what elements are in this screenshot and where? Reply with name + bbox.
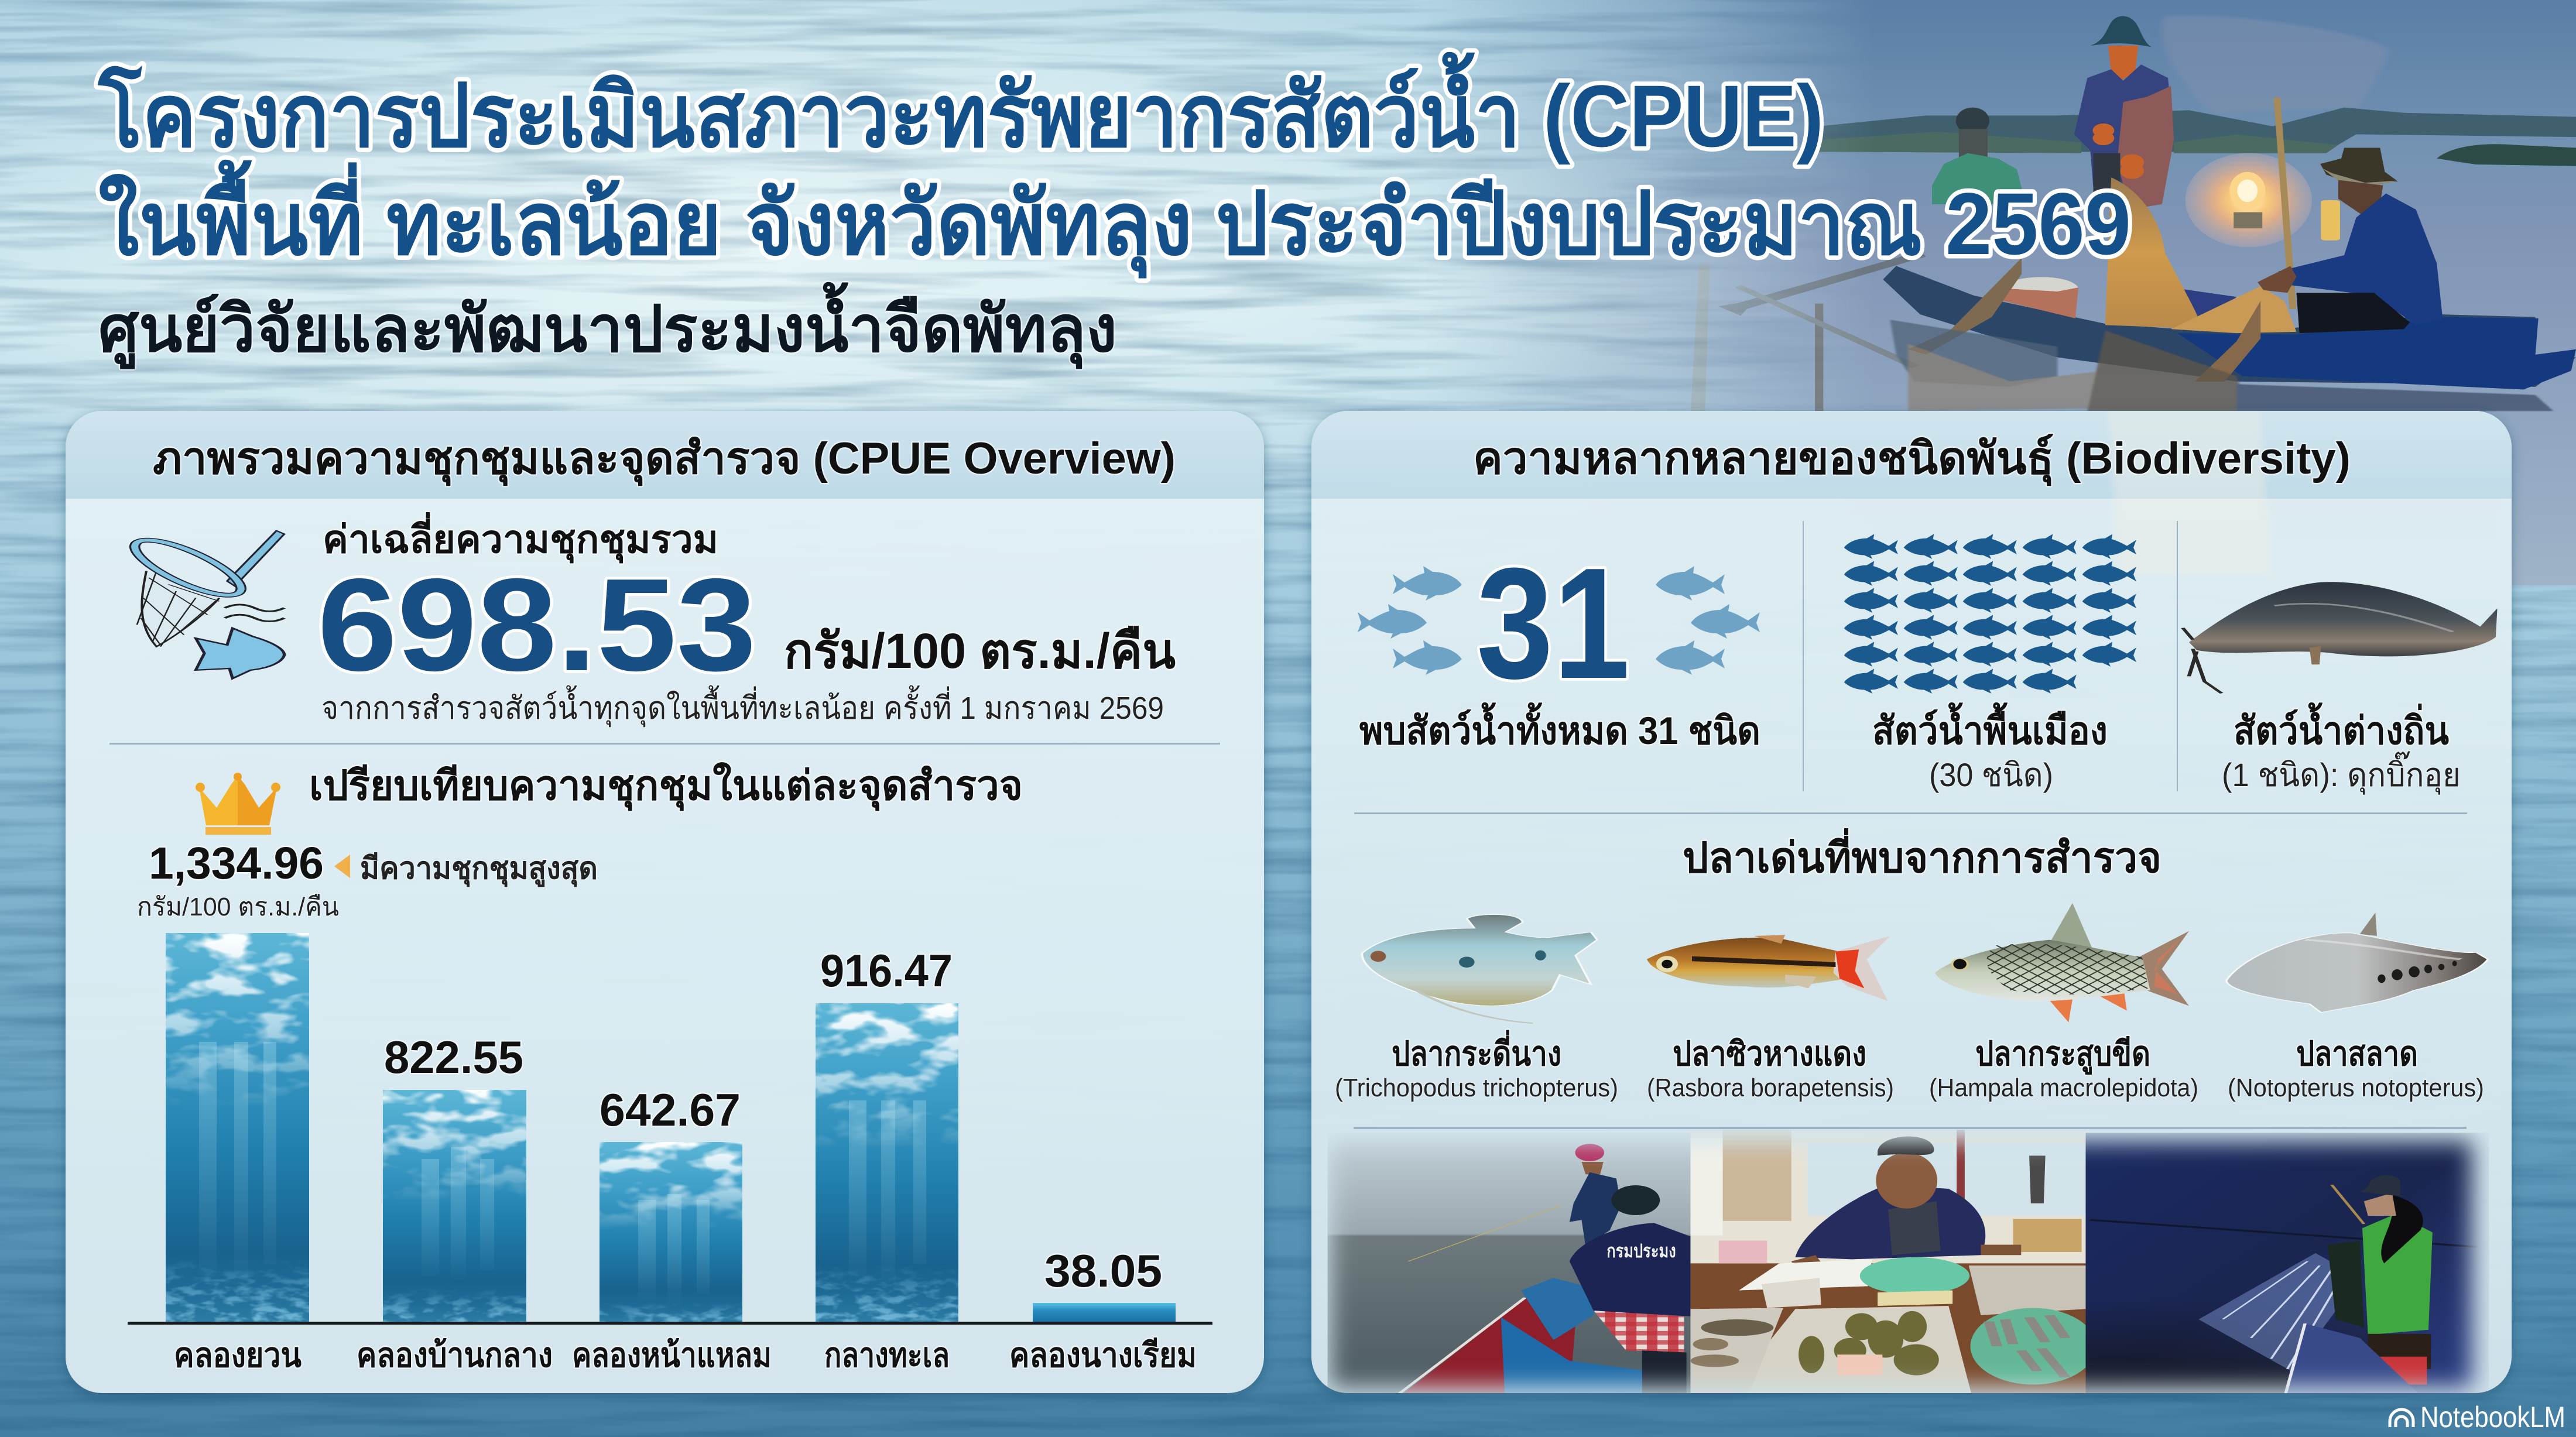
subtitle: ศูนย์วิจัยและพัฒนาประมงน้ำจืดพัทลุง xyxy=(98,282,1117,369)
axis label: คลองนางเรียม: คลองนางเรียม xyxy=(1009,1336,1197,1374)
label: average density: ค่าเฉลี่ยความชุกชุมรวม xyxy=(323,512,718,564)
scientific name 4: (Notopterus notopterus) xyxy=(2228,1074,2484,1102)
heading: CPUE overview: ภาพรวมความชุกชุมและจุดสำรวจ (CPUE Overview) xyxy=(153,434,1176,486)
icon: grid of native fish xyxy=(1844,534,2136,694)
axis label: คลองบ้านกลาง: คลองบ้านกลาง xyxy=(357,1336,553,1374)
title line 2: ในพื้นที่ ทะเลน้อย จังหวัดพัทลุง ประจำปีงบประมาณ 2569 xyxy=(98,159,2131,279)
seated man xyxy=(2258,148,2443,333)
panel: biodiversity xyxy=(1311,411,2512,1393)
icon: pointer arrow xyxy=(334,855,350,878)
icon: six small fish xyxy=(1358,566,1760,675)
panel header band xyxy=(66,411,1264,499)
icon: crown xyxy=(196,773,280,835)
small unit: กรัม/100 ตร.ม./คืน xyxy=(137,893,339,921)
highest note: มีความชุกชุมสูงสุด xyxy=(360,852,598,887)
scientific name 1: (Trichopodus trichopterus) xyxy=(1335,1074,1618,1102)
boy in green shirt xyxy=(1932,108,2022,204)
source note: จากการสำรวจสัตว์น้ำทุกจุดในพื้นที่ทะเลน้อย ครั้งที่ 1 มกราคม 2569 xyxy=(321,685,1164,728)
bar: คลองยวน xyxy=(166,933,309,1323)
label: native species: สัตว์น้ำพื้นเมือง xyxy=(1872,702,2108,752)
boat xyxy=(1883,266,2576,390)
count: alien species: (1 ชนิด): ดุกบิ๊กอุย xyxy=(2222,751,2461,795)
photo: night net survey with headlamp xyxy=(2085,1133,2489,1399)
chart axis xyxy=(128,1322,1212,1325)
fish: gourami xyxy=(1362,914,1597,1023)
waves xyxy=(225,605,285,622)
lantern xyxy=(2186,97,2340,309)
panel header band xyxy=(1311,411,2512,574)
bar: คลองหน้าแหลม xyxy=(600,1142,742,1323)
bar: กลางทะเล xyxy=(816,1003,958,1323)
image: walking catfish xyxy=(2183,582,2498,693)
oar and poles xyxy=(1691,251,1926,411)
label: total species: พบสัตว์น้ำทั้งหมด 31 ชนิด xyxy=(1359,702,1760,752)
fish name 4: ปลาสลาด xyxy=(2296,1035,2418,1073)
fish name 2: ปลาซิวหางแดง xyxy=(1673,1035,1866,1073)
value: 916.47: 916.47 xyxy=(820,945,953,996)
panel: CPUE overview xyxy=(66,411,1264,1393)
big number: 698.53 xyxy=(317,551,756,698)
notable fish images xyxy=(1362,903,2488,1023)
reflection xyxy=(1890,320,2553,411)
fish: rasbora xyxy=(1647,935,1890,1001)
label: alien species: สัตว์น้ำต่างถิ่น xyxy=(2234,702,2449,752)
photo: fishermen on a boat at dusk xyxy=(1347,0,2576,585)
heading: notable fish: ปลาเด่นที่พบจากการสำรวจ xyxy=(1683,828,2161,882)
heading: biodiversity: ความหลากหลายของชนิดพันธุ์ (Biodiversity) xyxy=(1473,434,2351,486)
fish: notopterus xyxy=(2226,913,2488,1013)
fish xyxy=(196,628,285,678)
photo: recording fish samples xyxy=(1690,1130,2096,1399)
photo strip: field survey xyxy=(1328,1130,2489,1399)
count: native species: (30 ชนิด) xyxy=(1929,756,2053,793)
axis label: คลองยวน: คลองยวน xyxy=(174,1336,302,1374)
highest value: 1,334.96 xyxy=(149,838,324,889)
value: 38.05: 38.05 xyxy=(1044,1245,1162,1297)
bar: คลองนางเรียม xyxy=(1033,1303,1176,1323)
fish name 1: ปลากระดี่นาง xyxy=(1392,1030,1561,1073)
value: 822.55: 822.55 xyxy=(384,1031,523,1083)
bar: คลองบ้านกลาง xyxy=(383,1090,526,1323)
scientific name 2: (Rasbora borapetensis) xyxy=(1647,1074,1894,1102)
unit: กรัม/100 ตร.ม./คืน xyxy=(784,623,1176,678)
title line 1: โครงการประเมินสภาวะทรัพยากรสัตว์น้ำ (CPUE) xyxy=(97,52,1824,165)
photo strip: field survey: กรมประมง xyxy=(1606,1240,1676,1261)
axis label: กลางทะเล: กลางทะเล xyxy=(824,1336,950,1374)
fish: hampala xyxy=(1935,903,2189,1023)
big number: 31: 31 xyxy=(1477,536,1630,712)
scientific name 3: (Hampala macrolepidota) xyxy=(1929,1074,2198,1102)
value: 642.67: 642.67 xyxy=(600,1084,741,1136)
standing man xyxy=(2074,16,2174,210)
icon: landing net and fish xyxy=(118,531,285,678)
heading: comparison: เปรียบเทียบความชุกชุมในแต่ละจุดสำรวจ xyxy=(309,762,1023,811)
net mesh xyxy=(137,571,219,647)
bar chart xyxy=(128,933,1212,1374)
axis label: คลองหน้าแหลม: คลองหน้าแหลม xyxy=(572,1336,772,1374)
photo: crew setting nets from boat xyxy=(1328,1133,1692,1398)
hoop and handle xyxy=(118,531,285,602)
net xyxy=(1908,177,2296,382)
fish name 3: ปลากระสูบขีด xyxy=(1975,1035,2150,1075)
